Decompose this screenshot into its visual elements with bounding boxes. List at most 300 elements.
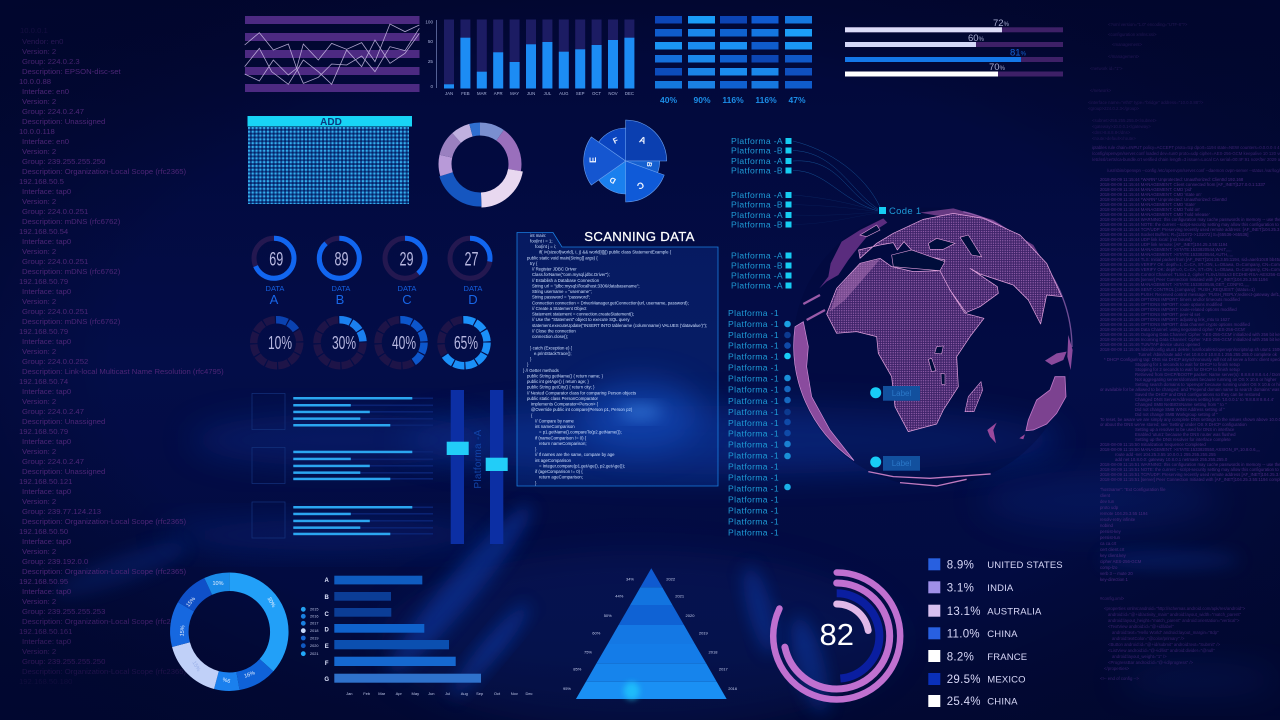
panel: code listing: } (527, 362, 529, 367)
panel: left network text log: Description: Unassigned (22, 467, 105, 476)
panel: left network text log: Interface: tap0 (22, 237, 71, 246)
pyramid chart: 85% (573, 666, 582, 672)
Caribbean traces (803, 295, 825, 320)
Madagascar (965, 382, 983, 412)
gauge group: data A B C D: DATA (398, 284, 416, 293)
donut chart with year legend: 15% (185, 596, 197, 609)
donut chart with year legend: 10% (212, 581, 224, 587)
panel: right system log text: ca ca.crt (1100, 541, 1117, 546)
legend: platforma squares with connectors to Code 1: Platforma -A (731, 270, 783, 280)
panel: left network text log: 192.168.50.74 (19, 377, 69, 386)
ADD panel with dot matrix (248, 116, 412, 204)
radial gauge 82 (773, 572, 900, 700)
panel: right system log text: <route>default</route> (1092, 136, 1136, 141)
panel: left network text log: 192.168.50.79 (19, 277, 68, 286)
panel: right system log text: proto udp (1100, 505, 1119, 510)
ADD panel with dot matrix: ADD (320, 117, 342, 128)
panel: right system log text: <ProgressBar android:id="@+id/progress" /> (1108, 660, 1194, 665)
panel: code listing: int main: (530, 233, 546, 238)
panel: left network text log: 192.168.50.121 (19, 477, 72, 486)
radial gauge 82: 82 (819, 617, 854, 652)
panel: code listing: public static class PersonComparator (527, 396, 598, 401)
pie chart A to F: F (612, 136, 620, 146)
legend: country percentages: 3.1% (947, 582, 974, 594)
monthly bar chart: JUL (544, 91, 552, 96)
horizontal bar chart A to G: Mar (378, 691, 386, 696)
panel: left network text log: Group: 239.255.255.253 (22, 607, 105, 616)
pyramid chart: 2017 (719, 666, 729, 672)
panel: right system log text: 2018-08-09 11:15:44 MANAGEMENT: CMD 'hold release' (1100, 212, 1210, 217)
horizontal bar chart A to G: G (324, 677, 329, 683)
list: platforma -1 rows with dots: Platforma -1 (728, 440, 779, 450)
monthly bar chart: APR (494, 91, 503, 96)
heat grid with percentages: 90% (693, 95, 711, 105)
panel: right system log text: <ListView android:id="@+id/list" android:divider="@null" (1108, 648, 1215, 653)
panel: right system log text: remote 104.25.3.55 1194 (1100, 511, 1148, 516)
horizontal bar chart A to G: Jun (428, 691, 435, 696)
panel: code listing: // Close the connection (532, 328, 576, 334)
pie chart A to F: A (638, 134, 648, 146)
legend: platforma squares with connectors to Code 1: Platforma -B (731, 220, 783, 230)
panel: right system log text: </management> (1108, 54, 1140, 59)
list: platforma -1 rows with dots: Platforma -1 (728, 396, 779, 406)
monthly bar chart: JAN (445, 91, 453, 96)
globe label upper: Label (892, 389, 912, 398)
gauge group: data A B C D: DATA (332, 284, 350, 293)
ring 40 percent (378, 320, 424, 366)
panel: code listing: public String getCity() { return city; } (527, 385, 595, 390)
donut chart with year legend: 30% (266, 596, 276, 609)
monthly bar chart: MAY (510, 91, 519, 96)
panel: right system log text: 2018-08-09 11:15:46 TUN/TAP device utun1 opened (1100, 342, 1200, 347)
panel: right system log text: 2018-08-09 11:15:50 Initialization Sequence Completed (1100, 442, 1206, 447)
horizontal bar chart A to G: E (325, 644, 329, 650)
pyramid chart: 2022 (666, 576, 676, 582)
gauge group: data A B C D: C (402, 292, 412, 307)
panel: left network text log: Version: 2 (22, 647, 56, 656)
globe (793, 206, 1073, 486)
pyramid chart: 2018 (709, 650, 718, 654)
list: platforma -1 rows with dots: Platforma -1 (728, 418, 779, 428)
panel: right system log text: 2018-08-09 11:15:46 OPTIONS IMPORT: data channel crypto options modified (1100, 322, 1250, 327)
monthly bar chart: MAR (477, 91, 487, 96)
panel: right system log text: /etc/ssl/certs/ca-bundle.crt verified chain length=3 issuer=Local CA serial=00:4F:91 notAfter 2029 a (1092, 157, 1280, 162)
legend: platforma squares with connectors to Code 1: Platforma -A (731, 156, 783, 166)
panel: right system log text: 2018-08-09 11:15:44 MANAGEMENT: Client connected from [AF_INET]127.0.0.1:1337 (1100, 182, 1266, 187)
gauge group: data A B C D: 29 (400, 250, 414, 270)
legend: platforma squares with connectors to Code 1: Platforma -A (731, 136, 783, 146)
legend: country percentages: INDIA (987, 583, 1014, 594)
panel: right system log text: verb 3 -- mute 20 (1100, 571, 1133, 576)
ring 10 percent (254, 320, 300, 366)
panel: left network text log: Version: 2 (22, 197, 56, 206)
panel: code listing: // Nested Comparator class for comparing Person objects (527, 390, 636, 395)
year legend: 2018 (310, 629, 318, 633)
panel: code listing: String password = "password"; (532, 295, 590, 300)
panel: left network text log: Group: 224.0.0.252 (22, 357, 88, 366)
Australia (1026, 377, 1066, 431)
panel: code listing: Class.forName("com.mysql.jdbc.Driver"); (532, 272, 610, 277)
legend: platforma squares with connectors to Code 1: Platforma -B (731, 146, 783, 156)
panel: right system log text: <!-- end of config --> (1100, 676, 1139, 681)
year legend: 2020 (310, 644, 318, 648)
heat grid with percentages: 47% (788, 95, 806, 105)
panel: right system log text: 2018-08-09 11:15:44 MANAGEMENT: CMD 'state' (1100, 202, 1196, 207)
panel: left network text log: Description: EPSON-disc-set (22, 67, 122, 76)
panel: left network text log: Group: 224.0.2.47 (22, 107, 84, 116)
panel: left network text log: 192.168.50.5 (19, 177, 64, 186)
panel: right system log text: 2018-08-09 11:15:46 Incoming Data Channel: Cipher 'AES-256-GCM' initialized with 256 bit key (1100, 337, 1280, 342)
panel: code listing: Statement statement = connection.createStatement(); (532, 312, 634, 316)
horizontal bar chart A to G: Aug (461, 691, 468, 696)
list: platforma -1 rows with dots: Platforma -1 (728, 384, 779, 394)
panel: left network text log: 10.0.0.118 (19, 127, 55, 136)
list: platforma -1 rows with dots (728, 308, 791, 538)
panel: code listing: public String getName() { return name; } (527, 374, 604, 378)
pyramid chart: 2016 (728, 686, 738, 691)
panel: code listing: { (531, 413, 533, 418)
panel: left network text log: Group: 239.77.124.213 (22, 507, 101, 516)
panel: code listing: // Establish a Database Connection (532, 278, 600, 283)
panel: right system log text: android:text="Hello World" android:layout_margin="8dp" (1112, 630, 1219, 635)
panel: right system log text: 2018-08-09 11:15:46 OPTIONS IMPORT: peer-id set (1100, 312, 1201, 317)
progress bars 72 60 81 70 percent: 72% (993, 18, 1010, 29)
legend: country percentages: CHINA (987, 696, 1018, 708)
gauge group: segmented percent rings: 10% (268, 333, 292, 353)
horizontal bar chart A to G: Apr (396, 691, 402, 696)
panel: left network text log: Version: 2 (22, 447, 56, 456)
panel: right system log text: 2018-08-09 11:15:44 *WARN* Unprotected: Unauthorized: ClientId (1100, 197, 1227, 202)
horizontal bar chart A to G: Dec (525, 691, 533, 696)
panel: left network text log: Group: 239.255.255.250 (22, 157, 105, 166)
monthly bar chart: 50 (428, 39, 433, 44)
progress bars 72 60 81 70 percent (845, 18, 1063, 76)
donut chart with year legend: 15% (180, 625, 186, 637)
panel: left network text log: Description: mDNS (rfc6762) (22, 217, 121, 226)
panel: right system log text: Stopping for 1 seconds to wait for DHCP to finish setup (1135, 362, 1240, 367)
panel: right system log text: client (1100, 493, 1111, 498)
legend: platforma squares with connectors to Code 1 (731, 136, 880, 290)
legend: country percentages: FRANCE (987, 652, 1027, 663)
list: platforma -1 rows with dots: Platforma -1 (728, 450, 779, 460)
lakes (928, 346, 945, 385)
panel: code listing: foo(int i = 1; (530, 238, 553, 244)
legend: country percentages: CHINA (987, 629, 1018, 640)
panel: code listing: e.printStackTrace(); (534, 351, 572, 356)
horizontal bar chart A to G: Sep (476, 691, 484, 696)
panel: left network text log: 192.168.50.79 (19, 327, 68, 336)
donut chart: purple and blue (444, 128, 516, 200)
panel: left network text log: Version: 2 (22, 347, 56, 356)
panel: code listing: Connection connection = DriverManager.getConnection(url, username, password); (532, 300, 689, 305)
gauge group: segmented percent rings: 65% (454, 333, 478, 353)
panel: right system log text: 2018-08-09 11:15:46 Data Channel: using negotiated cipher 'AES-256-GCM' (1100, 327, 1246, 332)
panel: right system log text: <configuration xmlns:xsi> (1108, 32, 1157, 37)
pyramid chart: 2021 (675, 594, 685, 598)
panel: left network text log (19, 26, 224, 686)
panel: left network text log: Group: 224.0.2.47 (22, 457, 84, 466)
monthly bar chart (425, 20, 634, 96)
panel: left network text log: Interface: en0 (22, 137, 69, 146)
panel: right system log text: cipher AES-256-GCM (1100, 559, 1142, 564)
panel: left network text log: 192.168.50.79 (19, 427, 68, 436)
panel: code listing: // Use the "Statement" object to execute SQL query (532, 317, 630, 322)
panel: right system log text: 2018-08-09 11:15:46 OPTIONS IMPORT: adjusting link_mtu to 1627 (1100, 317, 1230, 322)
horizontal bar chart A to G: May (412, 691, 419, 696)
South America crescent (794, 322, 854, 461)
panel: code listing (517, 232, 718, 486)
panel: left network text log: Version: 2 (22, 47, 56, 56)
panel: code listing: return nameComparison; (539, 441, 587, 446)
panel: code listing: statement.executeUpdate("INSERT INTO tablename (columnname) VALUES ('datavalue')"); (532, 323, 707, 328)
panel: right system log text: persist-key (1100, 529, 1122, 534)
monthly bar chart: JUN (527, 91, 535, 96)
horizontal bar chart A to G: F (325, 661, 329, 667)
donut chart with year legend: 16% (243, 670, 256, 680)
legend: country percentages: MEXICO (987, 674, 1026, 686)
sliders: platforma -A (447, 390, 508, 544)
Indonesia (1045, 335, 1073, 370)
panel: right system log text: cert client.crt (1100, 547, 1125, 552)
panel: left network text log: 192.168.50.50 (19, 527, 68, 536)
pyramid chart: 60% (592, 630, 601, 636)
year legend: 2015 (310, 608, 318, 612)
horizontal bar chart A to G: B (325, 595, 330, 601)
panel: left network text log: Description: Organization-Local Scope (rfc2365) (22, 617, 187, 626)
panel: right system log text: resolv-retry infinite (1100, 517, 1136, 522)
legend: platforma squares with connectors to Code 1: Platforma -B (731, 166, 783, 176)
panel: right system log text: 2018-08-09 11:15:46 OPTIONS IMPORT: route options modified (1100, 302, 1223, 307)
gauge group: data A B C D: 89 (334, 250, 348, 270)
panel: code listing: implements Comparator<Person> { (531, 402, 599, 406)
donut chart with year legend: %6 (222, 677, 231, 685)
panel: right system log text: 2018-08-09 11:15:44 UDP link local: (not bound) (1100, 237, 1192, 242)
gauge group: segmented percent rings: 30% (332, 333, 356, 353)
top rim land (920, 208, 1063, 295)
atmosphere edge (963, 212, 1072, 347)
panel: right system log text: <management> (1112, 42, 1143, 47)
year legend: 2017 (310, 622, 318, 626)
panel: left network text log: 192.168.50.54 (19, 227, 69, 236)
panel: right system log text: Not aggregating servers/domains because running on OS X 10.6 or higher (1135, 377, 1277, 382)
panel: code listing: // If names are the same, compare by age (535, 452, 615, 457)
horizontal bar chart A to G (324, 576, 533, 696)
panel: right system log text: dev tun (1100, 499, 1115, 504)
panel: code listing: // Register JDBC Driver (532, 266, 577, 272)
panel: right system log text: <network id="1"> (1090, 66, 1123, 71)
panel: right system log text: 2018-08-09 11:15:46 OPTIONS IMPORT: timers and/or timeouts modified (1100, 297, 1240, 302)
panel: left network text log: Version: 2 (22, 547, 56, 556)
panel: left network text log: Group: 239.192.0.0 (22, 557, 88, 566)
panel: left network text log: Description: Unassigned (22, 417, 105, 426)
panel: right system log text: 2018-08-09 11:15:44 *WARN* Unprotected: Unauthorized: ClientId 192.168 (1100, 177, 1244, 182)
panel: right system log text: 2018-08-09 11:15:46 OPTIONS IMPORT: route-related options modified (1100, 307, 1237, 312)
Sahara highlight (830, 259, 880, 312)
panel: left network text log: Version: 2 (22, 147, 56, 156)
panel: right system log text: 2018-08-09 11:15:46 Outgoing Data Channel: Cipher 'AES-256-GCM' initialized with 256 bit key (1100, 332, 1280, 337)
list: platforma -1 rows with dots: Platforma -1 (728, 462, 779, 472)
panel: code listing: } catch (Exception e) { (530, 346, 573, 350)
panel: left network text log: Interface: tap0 (22, 337, 71, 346)
pie chart A to F: D (608, 175, 618, 186)
panel: right system log text: <dns>8.8.8.8</dns> (1092, 130, 1131, 135)
panel: code listing: public int getAge() { return age; } (527, 379, 589, 384)
globe label upper (870, 386, 920, 401)
panel: right system log text: 2018-08-09 11:15:44 UDP link remote: [AF_INET]104.25.3.55:1194 (1100, 242, 1228, 247)
panel: right system log text: persist-tun (1100, 535, 1121, 540)
panel: right system log text: 2018-08-09 11:15:46 SENT CONTROL [company]: 'PUSH_REQUEST' (status=1) (1100, 287, 1255, 292)
panel: right system log text (1088, 22, 1280, 681)
panel: right system log text: </network> (1090, 88, 1112, 93)
year legend: 2016 (310, 615, 318, 619)
panel: left network text log: Version: 2 (22, 247, 56, 256)
list: platforma -1 rows with dots: Platforma -1 (728, 494, 779, 504)
horizontal bar chart A to G: D (325, 628, 330, 634)
panel: right system log text: 2018-08-09 11:15:44 MANAGEMENT: >STATE:1533820544,WAIT,,,,, (1100, 247, 1232, 252)
legend: platforma squares with connectors to Code 1: Platforma -A (731, 280, 783, 290)
progress bars 72 60 81 70 percent: 60% (968, 33, 985, 44)
panel: right system log text: android:layout_height="match_parent" android:orientation="vertical"> (1108, 618, 1240, 623)
pie chart A to F (584, 120, 667, 202)
Antarctica (868, 472, 991, 486)
panel: right system log text: 2018-08-09 11:15:46 MANAGEMENT: >STATE:1533820546,GET_CONFIG,,,,, (1100, 282, 1249, 287)
panel: right system log text: <subnet>255.255.255.0</subnet> (1092, 118, 1157, 123)
panel: code listing: int nameComparison (535, 424, 575, 429)
panel: left network text log: Group: 239.255.255.250 (22, 657, 105, 666)
panel: code listing: String url = "jdbc:mysql://localhost:3306/databasename"; (532, 284, 640, 288)
panel: left network text log: Group: 224.0.0.251 (22, 307, 88, 316)
panel: right system log text: route add -net 104.25.3.55 10.0.0.1 255.255.255.255 (1115, 452, 1216, 457)
donut chart with year legend: 15% (191, 660, 201, 673)
panel: left network text log: Description: Organization-Local Scope (rfc2365) (22, 517, 187, 526)
panel: right system log text: android:id="@+id/activity_main" android:layout_width="match_parent" (1108, 612, 1242, 617)
gauge group: data A B C D (254, 238, 490, 307)
panel: left network text log: Interface: tap0 (22, 287, 71, 296)
horizontal bar chart A to G: Jul (445, 691, 450, 696)
panel: empty boxes with horizontal bars (252, 394, 433, 538)
legend: country percentages: 29.5% (947, 674, 981, 686)
panel: right system log text: android:layout_weight="1" /> (1112, 654, 1167, 659)
panel: right system log text: Tunnel: /sbin/route add -net 10.8.0.0 10.8.0.1 255.255.255.0 complete ok (1138, 352, 1278, 357)
donut chart with year legend (179, 581, 318, 685)
panel: right system log text: <gateway>10.0.0.1</gateway> (1092, 124, 1151, 129)
panel: right system log text: 2018-08-09 11:15:44 MANAGEMENT: CMD 'hold on' (1100, 207, 1200, 212)
panel: code listing: if( i>(sizeof(world), i, j) && world[i][j]) public class StatementExample { (539, 250, 672, 255)
panel: code listing: String username = "username"; (532, 289, 592, 294)
dark seas (860, 225, 982, 271)
panel: right system log text: <TextView android:id="@+id/label" (1108, 624, 1174, 629)
panel: left network text log: Description: mDNS (rfc6762) (22, 267, 121, 276)
panel: right system log text: 2018-08-09 11:15:45 [server] Peer Connection Initiated with [AF_INET]104.25.3.55:1194 (1100, 277, 1268, 282)
panel: left network text log: Interface: tap0 (22, 637, 71, 646)
panel: right system log text: Did not change SMB Workgroup setting of '' (1135, 412, 1218, 417)
panel: right system log text: Setting up the DNS resolver for interface complete (1135, 437, 1231, 442)
panel: right system log text: Stopping for 2 seconds to wait for DHCP to finish setup (1135, 367, 1240, 372)
panel: code listing: return ageComparison; (539, 475, 583, 480)
legend: platforma squares with connectors to Code 1: Platforma -A (731, 250, 783, 260)
monthly bar chart: AUG (559, 91, 569, 96)
panel: code listing: int ageComparison (535, 458, 572, 463)
panel: left network text log: Vendor: en0 (22, 37, 63, 46)
progress bars 72 60 81 70 percent: 81% (1010, 48, 1027, 58)
panel: right system log text: #config.xml> (1100, 596, 1125, 601)
gauge group: segmented percent rings (254, 320, 487, 366)
list: platforma -1 rows with dots: Platforma -1 (728, 516, 779, 526)
panel: left network text log: Group: 224.0.0.251 (22, 257, 88, 266)
year legend (301, 607, 318, 656)
panel: left network text log: Interface: tap0 (22, 437, 71, 446)
panel: left network text log: Description: Organization-Local Scope (rfc2365) (22, 167, 187, 176)
panel: code listing: foo(int j = i; (535, 244, 556, 249)
panel: right system log text: Did not change SMB WINS Address setting of '' (1135, 407, 1225, 412)
panel: right system log text: Saved the DHCP and DNS configurations so they can be restored (1135, 392, 1261, 397)
gauge group: data A B C D: DATA (464, 284, 482, 293)
monthly bar chart: NOV (608, 91, 618, 96)
list: platforma -1 rows with dots: Platforma -1 (728, 407, 779, 417)
list: platforma -1 rows with dots: Platforma -1 (728, 472, 779, 482)
horizontal bar chart A to G: A (325, 578, 330, 584)
gauge group: data A B C D: D (468, 292, 478, 307)
panel: left network text log: Version: 2 (22, 97, 56, 106)
panel: right system log text: <interface name="eth0" type="bridge" address="10.0.0.88"/> (1088, 100, 1204, 105)
monthly bar chart: OCT (592, 91, 602, 96)
gauge group: data A B C D: 27 (464, 250, 478, 270)
list: platforma -1 rows with dots: Platforma -1 (728, 340, 779, 350)
legend: country percentages: 8.9% (947, 560, 974, 572)
monthly bar chart: 0 (430, 84, 433, 89)
gauge group: data A B C D: 69 (269, 250, 283, 270)
gauge group: data A B C D: DATA (266, 284, 284, 293)
legend: platforma squares with connectors to Code 1: Platforma -A (731, 210, 783, 220)
panel: right system log text: key-direction 1 (1100, 577, 1129, 582)
Eurasia and Arabia (859, 213, 1062, 324)
list: platforma -1 rows with dots: Platforma -1 (728, 319, 779, 329)
panel: left network text log: Group: 224.0.2.47 (22, 407, 84, 416)
New Zealand (987, 423, 1025, 443)
panel: right system log text: <?xml version="1.0" encoding="UTF-8"?> (1108, 22, 1188, 27)
monthly bar chart: FEB (461, 91, 470, 96)
panel: code listing: // Create a Statement Object (532, 306, 587, 311)
year legend: 2021 (310, 652, 318, 656)
panel: right system log text: Setting up a resolver to be used for DNS in interface (1135, 427, 1235, 432)
pyramid chart: 50% (604, 613, 612, 618)
pyramid chart: 2019 (699, 630, 709, 636)
panel: right system log text: or about the DNS we've stored; see 'Setting' under OS X DHCP configuration (1100, 422, 1247, 427)
panel: code listing: = p1.getName().compareTo(p2.getName()); (539, 430, 622, 435)
heat grid with percentages: 116% (755, 95, 777, 105)
panel: right system log text: key client.key (1100, 553, 1127, 558)
pyramid chart: 95% (563, 686, 571, 691)
panel: left network text log: Interface: tap0 (22, 487, 71, 496)
legend: country percentages: 8.2% (947, 652, 974, 664)
panel: left network text log: 192.168.50.180 (19, 677, 72, 686)
panel: right system log text: 2018-08-09 11:15:44 MANAGEMENT: CMD 'pid' (1100, 187, 1192, 192)
list: platforma -1 rows with dots: Platforma -1 (728, 506, 779, 516)
globe label lower (870, 456, 920, 471)
list: platforma -1 rows with dots: Platforma -1 (728, 528, 779, 538)
panel: code listing: if (ageComparison != 0) { (535, 469, 583, 474)
panel: left network text log: Version: 2 (22, 497, 56, 506)
code 1 tag: Code 1 (889, 206, 921, 217)
north-west rim land (819, 218, 887, 288)
horizontal bar chart A to G: Oct (494, 691, 501, 696)
panel: right system log text: Changed DNS ServerAddresses setting from '10.0.0.1' to '8.8.8.8 8.8.4.4' (1135, 397, 1274, 402)
list: platforma -1 rows with dots: Platforma -1 (728, 308, 779, 318)
panel: left network text log: Interface: tap0 (22, 187, 71, 196)
panel: code listing: } // Getter methods (523, 368, 559, 373)
panel: right system log text: android:textColor="@color/primary" /> (1112, 636, 1185, 641)
line chart on purple stripes (245, 16, 420, 92)
